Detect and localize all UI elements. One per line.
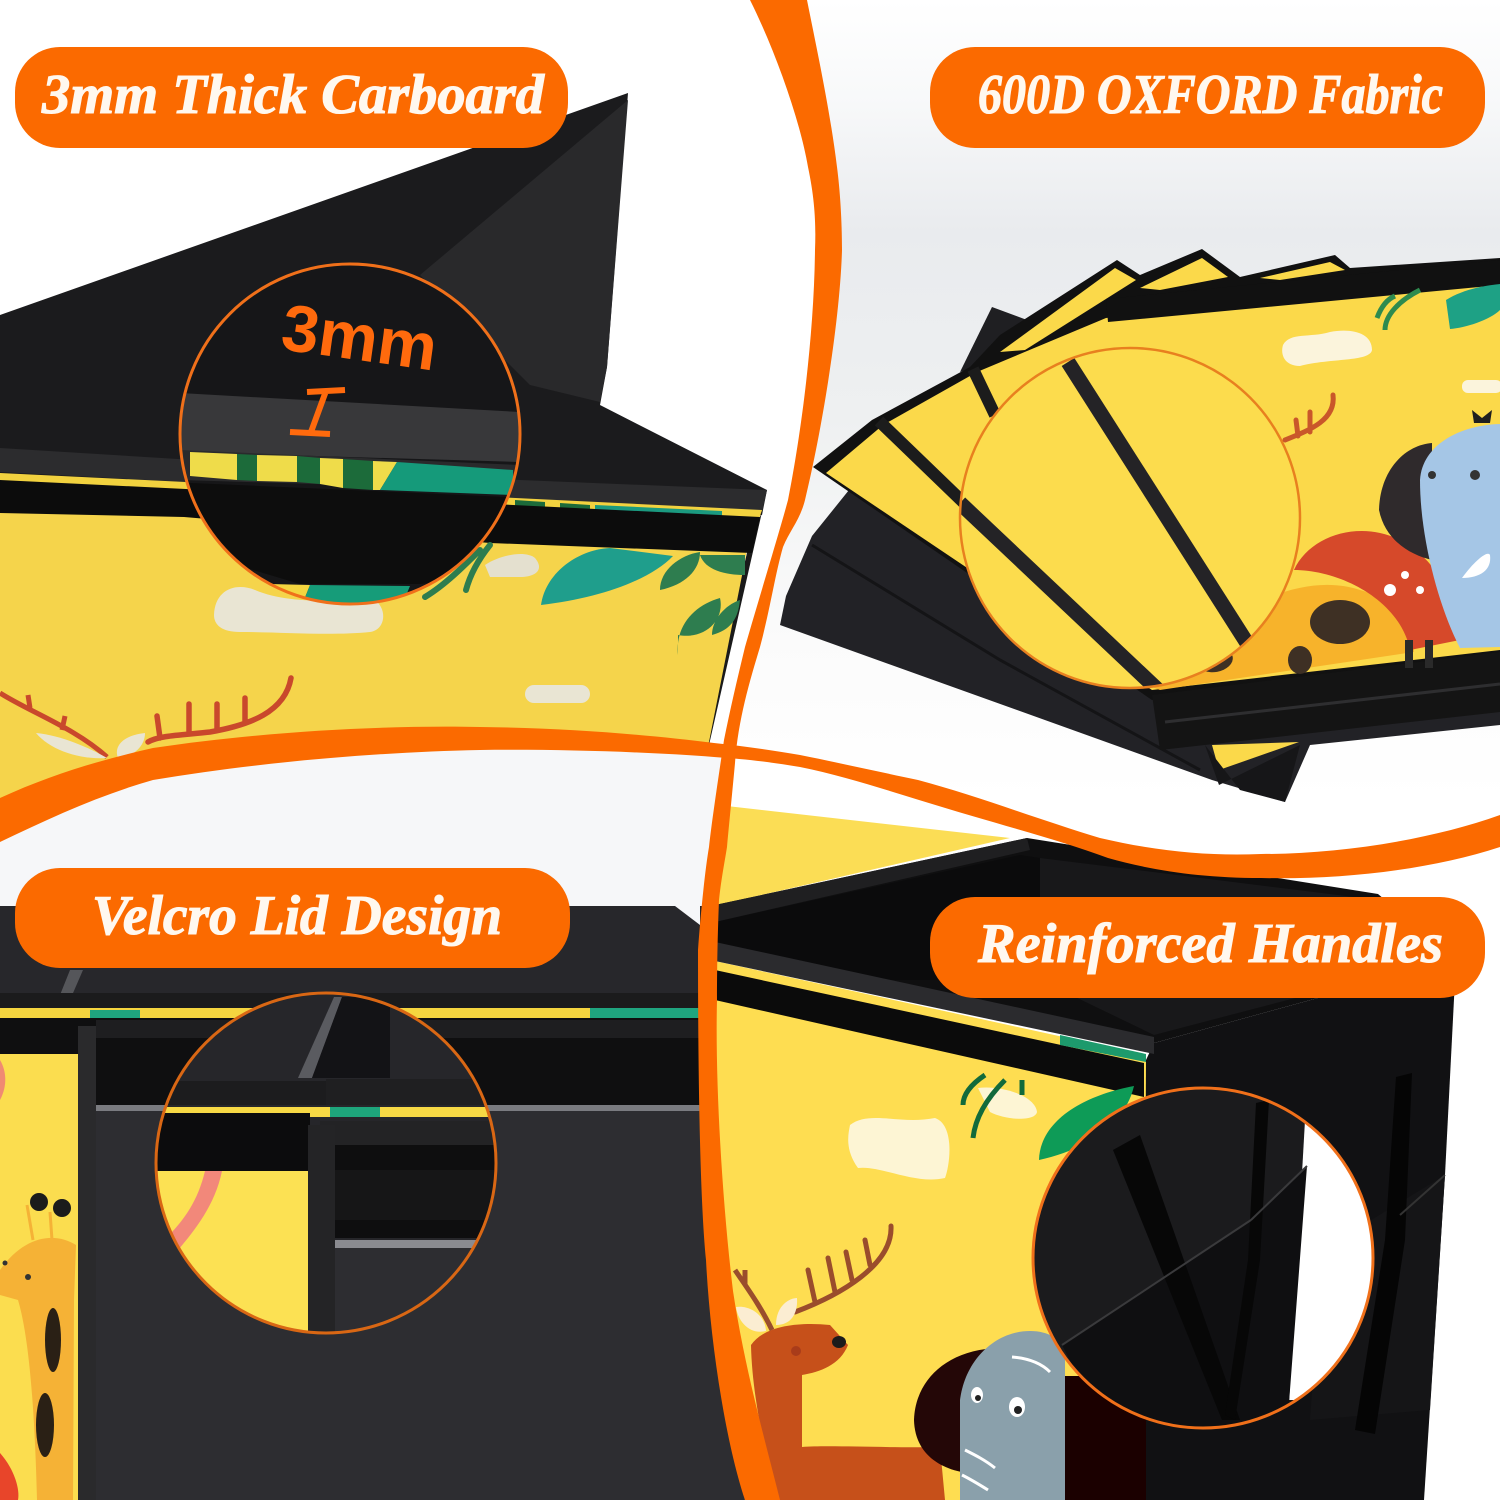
label pill: Reinforced Handles: Reinforced Handles [977,913,1443,975]
magnifier circle: oxford fabric [950,340,1310,700]
panel: reinforced handles box photo [708,752,1500,1500]
magnifier circle: handles [1030,1085,1380,1440]
label pill: 600D OXFORD Fabric [930,47,1485,148]
label pill: Reinforced Handles [930,897,1485,998]
icon: thickness marker [290,390,345,434]
panel: folded fabric stack photo [730,0,1500,860]
curve: vertical orange divider [698,0,842,1500]
label: 3mm: 3mm [277,290,442,385]
label pill: Velcro Lid Design: Velcro Lid Design [92,885,502,947]
magnifier circle: velcro lid [150,990,500,1341]
label pill: Velcro Lid Design [15,868,570,968]
label pill: 3mm Thick Carboard [15,47,568,148]
panel: velcro lid box photo [0,738,780,1500]
curve: horizontal orange divider [0,727,1500,878]
magnifier circle: 3mm cardboard [170,260,530,610]
panel: cardboard box photo [0,93,767,900]
outer right handle and pocket [1310,1073,1445,1434]
label pill: 3mm Thick Carboard: 3mm Thick Carboard [41,64,545,126]
